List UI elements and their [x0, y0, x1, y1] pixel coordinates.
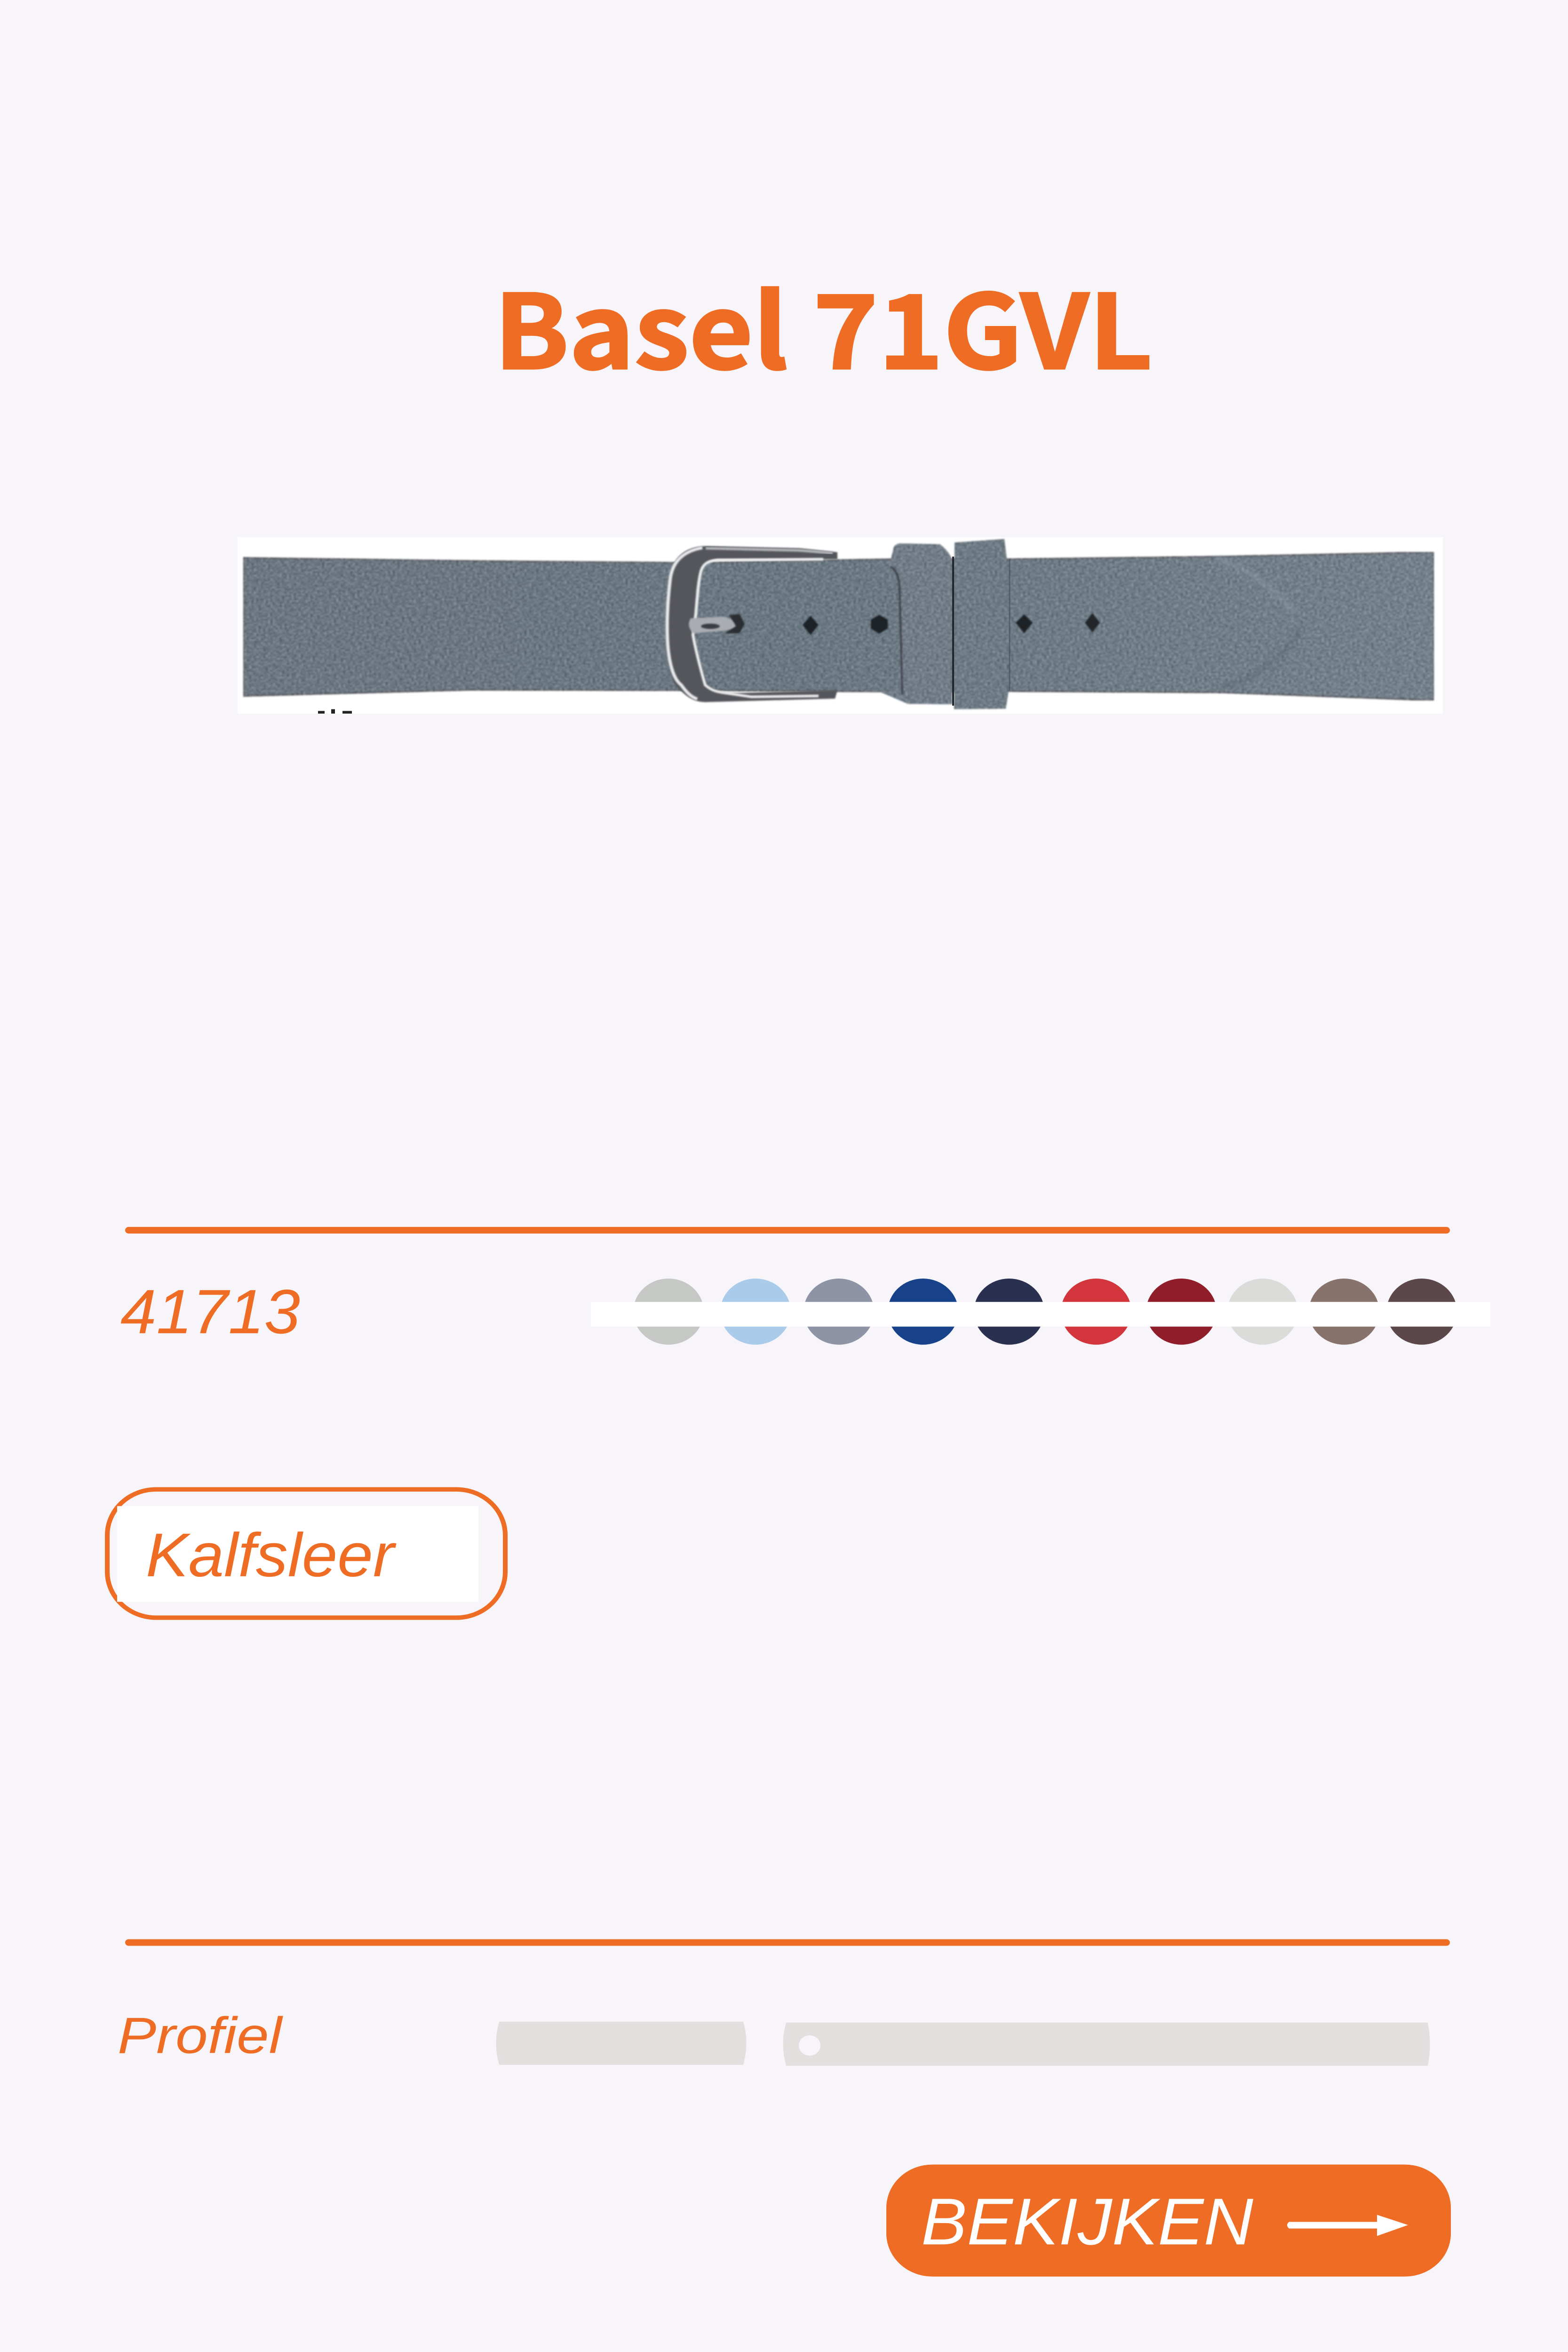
- swatch: red: [1061, 1279, 1131, 1345]
- swatch: dark brown: [1386, 1279, 1457, 1345]
- metal buckle: [666, 546, 837, 702]
- loop 1 shadow line: [891, 567, 902, 695]
- swatch: burgundy: [1146, 1279, 1217, 1345]
- strap tip seam, lower shadow: [1218, 628, 1299, 688]
- swatch: light grey: [633, 1279, 704, 1345]
- profile short strap piece: [496, 2022, 746, 2065]
- buckle frame: [666, 546, 837, 702]
- profile strap hole: [799, 2035, 820, 2056]
- line between loops: [952, 556, 954, 706]
- swatch: royal blue: [888, 1279, 958, 1345]
- material tag: [107, 1489, 505, 1618]
- strap tip seam, upper highlight: [1216, 558, 1294, 613]
- hole 4: [1085, 613, 1100, 632]
- swatch: pale grey: [1227, 1279, 1298, 1345]
- profile label: Profiel: [118, 2007, 283, 2064]
- hole 2: [871, 615, 888, 634]
- tag white fill: [117, 1506, 478, 1602]
- tongue shadow: [724, 614, 745, 633]
- white band over swatches: [591, 1302, 1490, 1327]
- tag label: Kalfsleer: [146, 1520, 397, 1589]
- tongue dark spot: [701, 624, 720, 629]
- article number: 41713: [120, 1277, 300, 1347]
- hole 3: [1016, 614, 1033, 633]
- cropped caption marks: [318, 709, 352, 714]
- strap keeper loop 2: [954, 539, 1009, 709]
- view button: [886, 2165, 1451, 2277]
- loop 2 edge shadow: [1009, 559, 1011, 691]
- buckle outer highlight: [667, 548, 702, 699]
- buckle inner highlight: [693, 559, 823, 697]
- image white background: [238, 537, 1443, 714]
- title: Basel 71GVL: [494, 250, 1153, 398]
- strap body: [243, 552, 1434, 700]
- swatch: blue grey: [804, 1279, 874, 1345]
- buckle tongue: [689, 617, 737, 633]
- button arrow: [1287, 2215, 1408, 2236]
- hole 1: [803, 616, 819, 635]
- swatch: taupe: [1309, 1279, 1379, 1345]
- buckle top sheen: [706, 548, 833, 553]
- swatch: light blue: [720, 1279, 791, 1345]
- button background: [886, 2165, 1451, 2277]
- divider line 1: [125, 1227, 1450, 1233]
- product image: watch strap: [238, 537, 1443, 714]
- profile diagram: [496, 2022, 1430, 2066]
- tag outline: [107, 1489, 505, 1618]
- profile long strap piece: [783, 2023, 1430, 2066]
- colour swatches: [591, 1279, 1490, 1345]
- divider line 2: [125, 1939, 1450, 1946]
- swatch: navy: [974, 1279, 1044, 1345]
- button label: BEKIJKEN: [921, 2185, 1254, 2258]
- strap keeper loop 1: [881, 543, 952, 704]
